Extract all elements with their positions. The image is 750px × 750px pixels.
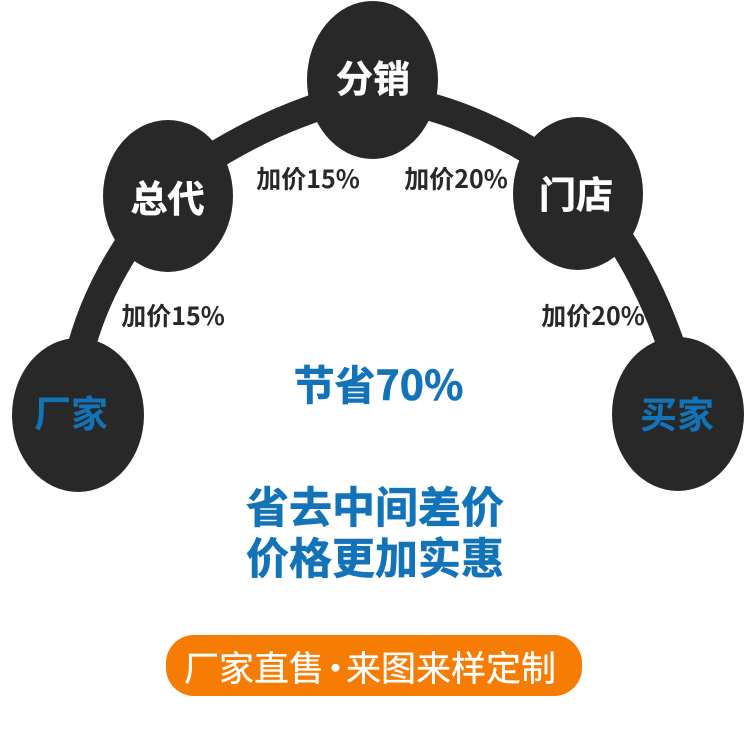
node: 厂家 [12, 338, 144, 492]
orange banner: 来图来样定制 [346, 641, 556, 692]
node: 买家 [612, 337, 744, 491]
slogan text: 价格更加实惠 [246, 525, 504, 587]
slogan text [246, 474, 504, 587]
orange banner: · [318, 641, 353, 692]
node: 分销: 分销 [336, 49, 410, 103]
node: 总代: 总代 [130, 169, 204, 223]
savings heading: 节省70% [294, 352, 463, 412]
arc connecting the nodes [78, 103, 676, 360]
node: 分销 [307, 1, 438, 159]
orange banner [166, 635, 582, 696]
node: 买家: 买家 [640, 385, 714, 439]
label: 加价15% left lower: 加价15% [121, 297, 225, 333]
orange banner: 厂家直售 [184, 641, 324, 692]
label: 加价20% right upper: 加价20% [404, 160, 508, 196]
label: 加价15% left upper: 加价15% [256, 160, 360, 196]
node: 总代 [103, 120, 233, 272]
node: 厂家: 厂家 [34, 384, 108, 438]
node: 门店 [513, 117, 643, 270]
slogan text: 省去中间差价 [246, 474, 504, 536]
node: 门店: 门店 [539, 165, 613, 219]
label: 加价20% right lower: 加价20% [541, 297, 645, 333]
